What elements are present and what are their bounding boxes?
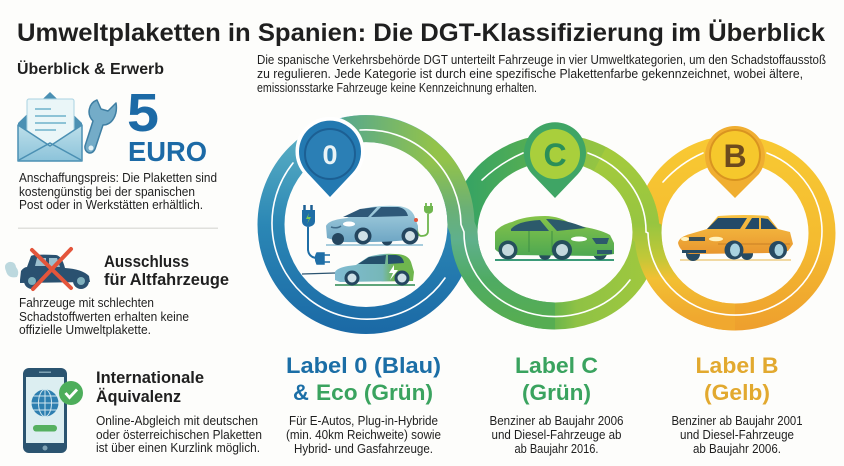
heading: Eco: Eco (Grün) (316, 380, 433, 405)
text: label B criteria: und Diesel-Fahrzeuge (680, 428, 794, 442)
intro text block (257, 53, 826, 95)
heading: label B: (Gelb) (704, 380, 770, 405)
heading: overview: Überblick & Erwerb (17, 59, 164, 78)
text: label 0 criteria: (min. 40km Reichweite) sowie (286, 428, 441, 442)
heading: exclusion: für Altfahrzeuge (104, 270, 229, 289)
column: label B (672, 353, 803, 456)
text: purchase price (19, 170, 217, 212)
text: label B criteria: ab Baujahr 2006. (693, 442, 781, 456)
text: label 0 criteria: Für E-Autos, Plug-in-Hybride (289, 414, 438, 428)
icon: phone with globe (23, 368, 83, 453)
text: purchase price: Anschaffungspreis: Die Plaketten sind (19, 170, 217, 185)
heading: exclusion (104, 252, 229, 289)
car: blue-green hybrid (335, 254, 415, 286)
text: equivalence: Online-Abgleich mit deutschen (96, 413, 258, 428)
text: label B criteria: Benziner ab Baujahr 2001 (672, 414, 803, 428)
title: Umweltplaketten in Spanien: Die DGT-Klassifizierung im Überblick (17, 18, 825, 47)
heading: exclusion: Ausschluss (104, 252, 189, 271)
column: label 0 and Eco (286, 353, 441, 456)
text: label C criteria: ab Baujahr 2016. (514, 442, 598, 456)
text: purchase price: Post oder in Werkstätten erhältlich. (19, 197, 203, 212)
icon: envelope (18, 92, 82, 161)
intro text block: zu regulieren. Jede Kategorie ist durch eine spezifische Plakettenfarbe gekennzeichnet, wobei ältere, (257, 67, 803, 81)
text: label C criteria: und Diesel-Fahrzeuge ab (492, 428, 622, 442)
price: 5 euro (127, 83, 207, 167)
heading: equivalence: Internationale (96, 368, 204, 387)
text: equivalence: ist über einen Kurzlink möglich. (96, 440, 260, 455)
chain of three rings (271, 128, 822, 320)
heading: label C (515, 353, 598, 405)
heading: equivalence (96, 368, 204, 406)
text: label 0 criteria: Hybrid- und Gasfahrzeuge. (294, 442, 433, 456)
heading: label B: Label B (696, 353, 778, 378)
badge: B (705, 126, 765, 198)
badge: 0 (297, 118, 363, 198)
price: 5 euro: 5 (127, 83, 159, 143)
badge: B: B (723, 138, 747, 174)
heading: Eco: & (293, 380, 309, 405)
icon: left charging plug (302, 205, 335, 274)
intro text block: emissionsstarke Fahrzeuge keine Kennzeichnung erhalten. (257, 81, 537, 95)
text: label C criteria (490, 414, 624, 456)
badge: C: C (543, 137, 567, 173)
car: green sedan (495, 216, 614, 261)
heading: label C: (Grün) (522, 380, 591, 405)
text: label C criteria: Benziner ab Baujahr 2006 (490, 414, 624, 428)
panel: overview and purchase (17, 59, 217, 212)
icon: wrench (85, 100, 116, 153)
text: exclusion: Fahrzeuge mit schlechten (19, 295, 154, 310)
panel: exclusion of old vehicles (5, 249, 229, 337)
badge: C (524, 122, 586, 198)
heading: label C: Label C (515, 353, 598, 378)
car: yellow sedan (678, 215, 793, 261)
car: blue electric car (326, 206, 423, 246)
heading: label 0: Label 0 (Blau) (286, 353, 441, 378)
icon: crossed-out old car (5, 249, 90, 289)
text: exclusion (19, 295, 189, 337)
text: label 0 criteria (286, 414, 441, 456)
text: equivalence: oder österreichischen Plaketten (96, 427, 262, 442)
badge: 0: 0 (322, 140, 338, 170)
text: label B criteria (672, 414, 803, 456)
column: label C (490, 353, 624, 456)
text: exclusion: offizielle Umweltplakette. (19, 322, 151, 337)
heading: label B (696, 353, 778, 405)
text: purchase price: kostengünstig bei der spanischen (19, 184, 195, 199)
heading: equivalence: Äquivalenz (96, 387, 181, 406)
text: equivalence (96, 413, 262, 455)
icon: green charging plug (413, 203, 433, 236)
panel: international equivalence (23, 368, 262, 455)
price: 5 euro: EURO (128, 136, 207, 167)
text: exclusion: Schadstoffwerten erhalten keine (19, 309, 189, 324)
white lane lines (272, 130, 822, 319)
